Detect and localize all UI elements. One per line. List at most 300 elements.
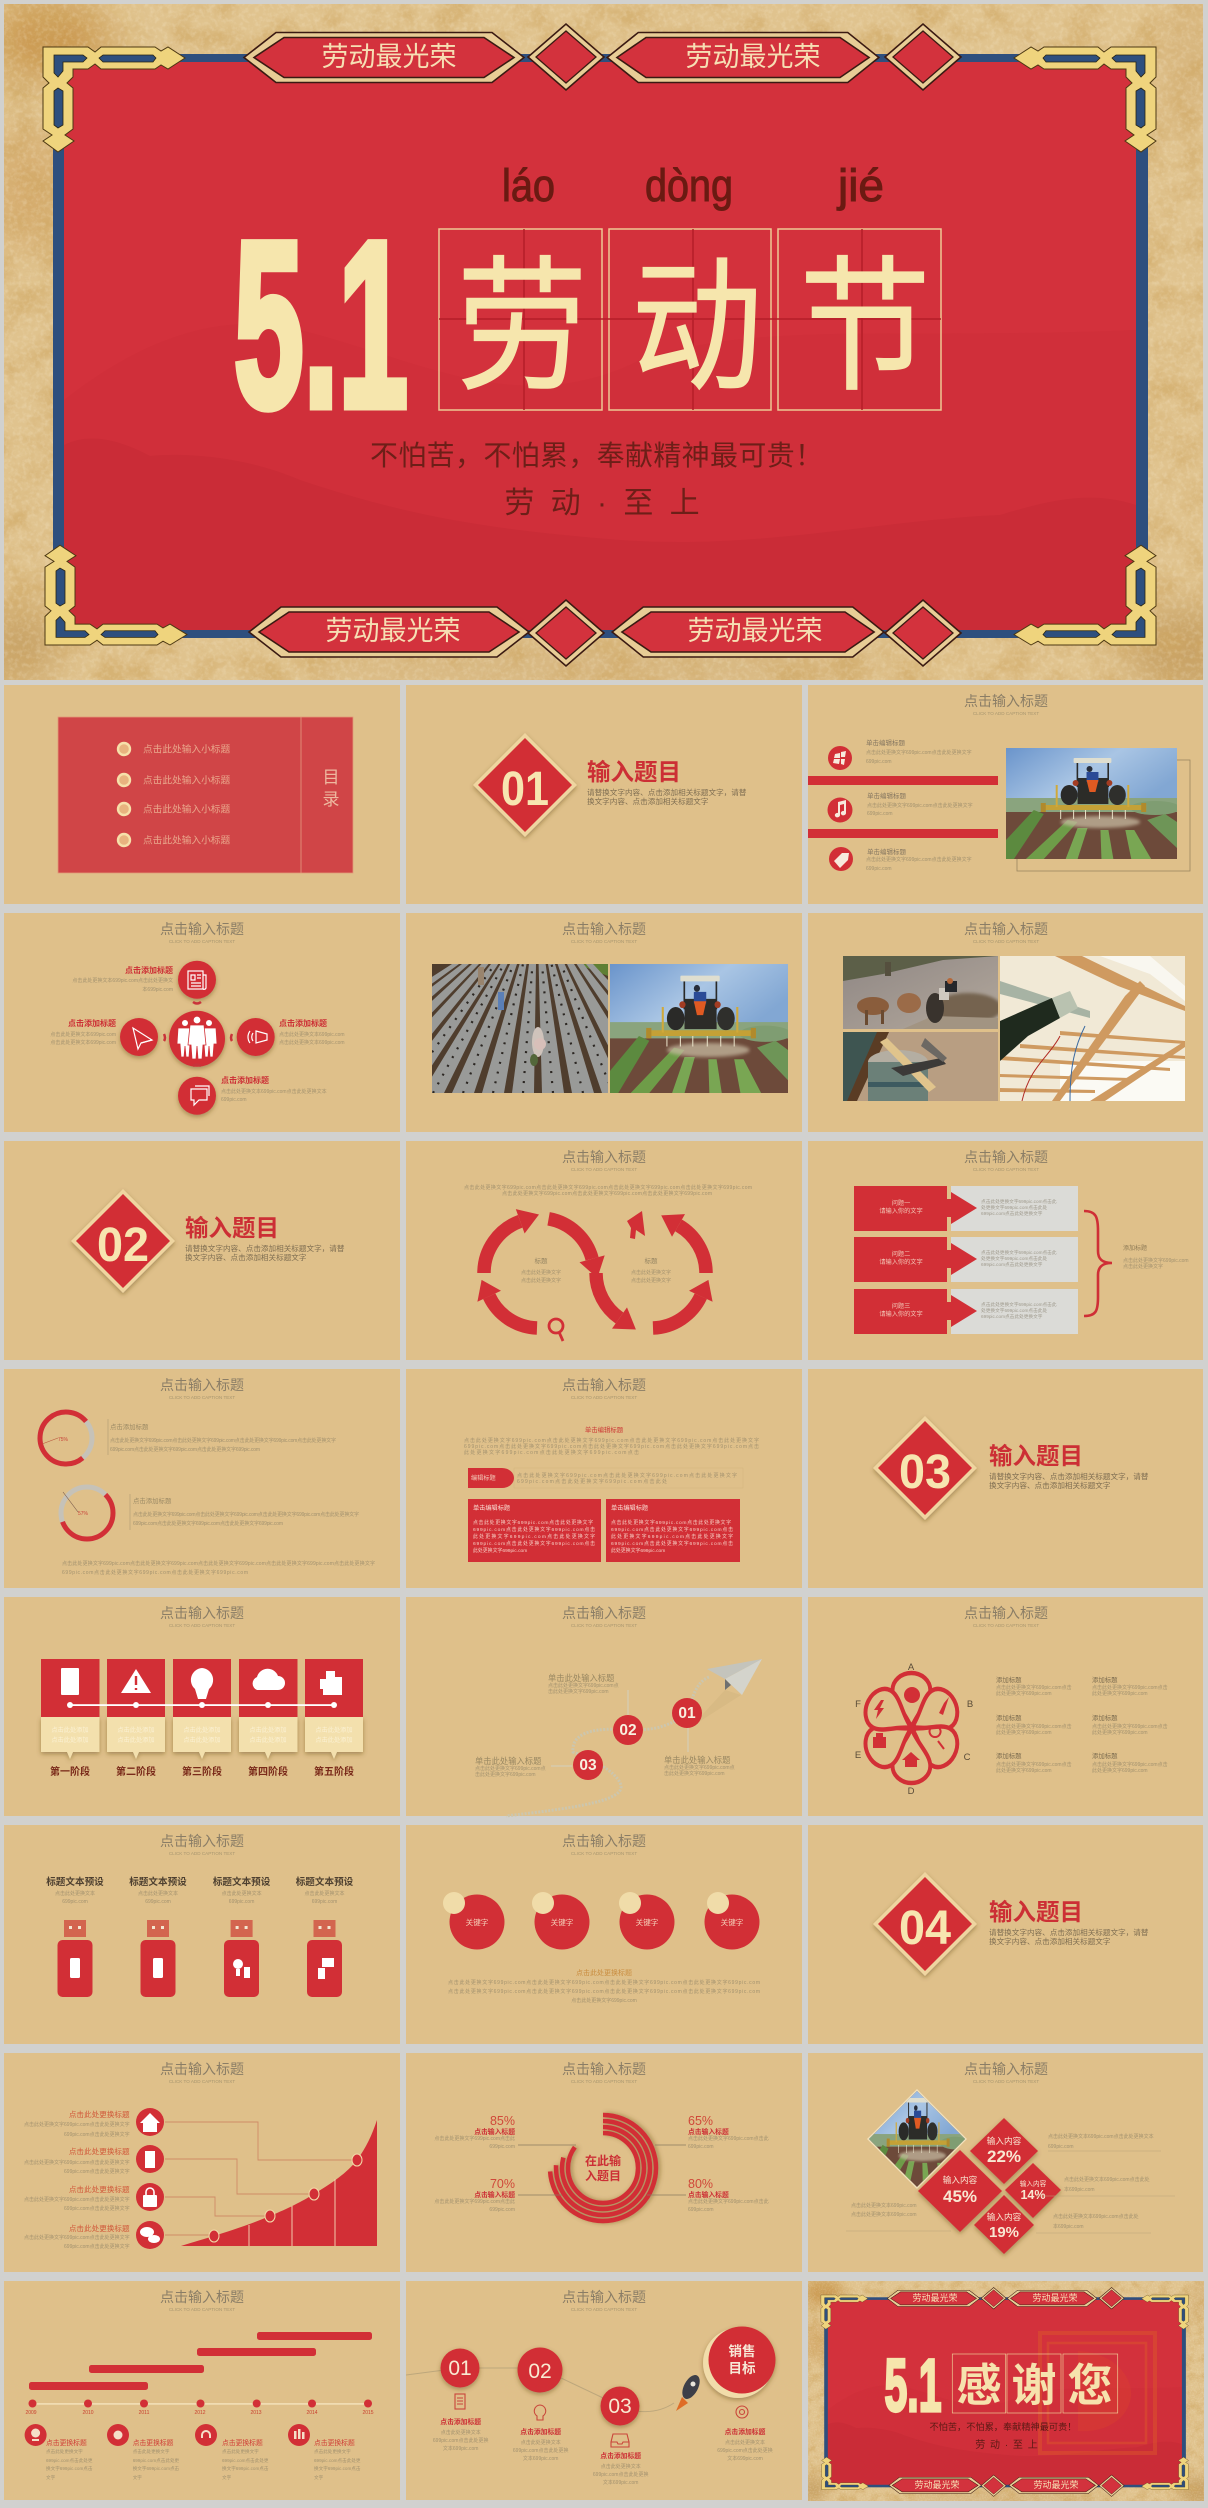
title: 点击输入标题 <box>964 921 1048 937</box>
chevrons <box>164 1002 232 1066</box>
number 04: 04 <box>899 1902 951 1955</box>
heading: 输入题目 <box>587 759 681 785</box>
photo: ceiling work <box>1000 956 1185 1101</box>
caption: CLICK TO ADD CAPTION TEXT <box>571 939 637 944</box>
cream card bases <box>41 1717 363 1759</box>
chart dividers <box>249 2179 335 2246</box>
heading: 输入题目 <box>989 1899 1083 1925</box>
subtitle: 劳 动 · 至 上 <box>975 2438 1039 2451</box>
callout bottom: 点击添加标题 <box>221 1075 269 1085</box>
left ring text: 点击此处更换文字 <box>521 1269 561 1276</box>
keyword labels: 关键字 <box>551 1917 574 1927</box>
keyword circles <box>450 1894 760 1950</box>
gray box text: 处更换文字699pic.com点击此处 <box>981 1307 1047 1314</box>
list description: 点击此处更换文字699pic.com点击此处更换文字 <box>866 856 972 863</box>
list lines: 点击此处更换文字699pic.com点击此处更换文字 <box>24 2196 130 2203</box>
item lines: 699pic.com点击此处更 <box>46 2457 93 2464</box>
flower descriptions: 此处更换文字699pic.com <box>1092 1729 1148 1736</box>
right ring text: 标题 <box>644 1256 658 1265</box>
cream card text: 点击此处添加 <box>315 1736 353 1744</box>
panel: timeline bars <box>4 2281 400 2500</box>
gray box text: 点击此处更换文字699pic.com点击此 <box>981 1301 1057 1308</box>
photo: hammer <box>843 1032 998 1101</box>
item lines <box>46 2448 361 2481</box>
right ring text <box>631 1256 671 1284</box>
red box right <box>606 1499 740 1562</box>
footer text: 699pic.com点击此处更换文字699pic.com点击此处更换文字699pic.com <box>62 1569 248 1576</box>
tag box: 699pic.com点击此处更换文字699pic.com点击此处 <box>517 1478 667 1485</box>
heading: 劳动节: 劳 <box>456 247 588 410</box>
flower descriptions: 此处更换文字699pic.com <box>996 1767 1052 1774</box>
callout right <box>279 1018 345 1046</box>
caption: CLICK TO ADD CAPTION TEXT <box>571 1395 637 1400</box>
ring 2 text: 点击添加标题 <box>133 1496 172 1505</box>
panel: usb drives <box>4 1825 400 2044</box>
area chart <box>181 2120 377 2246</box>
paragraph: 点击此处更换文字699pic.com点击此处更换文字699pic.com点击此处更换文字699pic.com点击此处更换文字699pic.com <box>448 1979 760 1986</box>
photo frame <box>1017 760 1190 871</box>
description <box>989 1927 1149 1946</box>
column text: 699pic.com <box>62 1899 88 1905</box>
goal circle <box>703 2326 776 2398</box>
number 01: 01 <box>501 763 549 816</box>
description: 换文字内容、点击添加相关标题文字 <box>989 1480 1111 1490</box>
column headings: 标题文本预设 <box>46 1876 104 1888</box>
list lines <box>24 2121 130 2250</box>
flower letters: E <box>855 1750 861 1761</box>
ring chart 75% <box>29 1401 103 1475</box>
gray box text: 699pic.com点击此处更换文字 <box>981 1210 1043 1217</box>
flower descriptions: 点击此处更换文字699pic.com点击 <box>1092 1684 1168 1691</box>
column 1 text: 点击添加标题 <box>440 2417 481 2426</box>
icon: magnifier <box>549 1319 563 1341</box>
list lines: 点击此处更换文字699pic.com点击此处更换文字 <box>24 2234 130 2241</box>
percentages: 45% <box>943 2187 977 2206</box>
label top: 击此处更换文字699pic.com <box>548 1688 609 1695</box>
cream card text: 点击此处添加 <box>183 1736 221 1744</box>
title: 点击输入标题 <box>562 921 646 937</box>
label left: 点击此处更换文字699pic.com点 <box>475 1765 546 1772</box>
column 4 text: 699pic.com点击此处更换 <box>717 2447 773 2454</box>
red diamonds <box>918 2118 1061 2254</box>
description <box>989 1471 1149 1490</box>
heading: 感谢您: 感 <box>956 2360 1002 2411</box>
item lines: 点击此处更换文字 <box>222 2448 259 2455</box>
title: 点击输入标题 <box>562 1605 646 1621</box>
keyword labels: 关键字 <box>636 1917 659 1927</box>
left ring text <box>521 1256 561 1284</box>
stage labels: 第三阶段 <box>182 1765 222 1778</box>
column text: 点击此处更换文本 <box>304 1890 345 1897</box>
ring 1 text: 点击此处更换文字699pic.com点击此处更换文字699pic.com点击此处更换文字699pic.com点击此处更换文字 <box>110 1437 336 1444</box>
column 1 text: 文本699pic.com <box>443 2445 478 2452</box>
flower petals <box>859 1673 964 1783</box>
photo: oxen plough <box>843 956 1002 1029</box>
intro text: 点击此处更换文字699pic.com点击此处更换文字699pic.com点击此处更换文字699pic.com <box>502 1190 712 1197</box>
step numbers: 03 <box>579 1757 597 1774</box>
seal overlay <box>1040 2333 1155 2453</box>
toc red block <box>58 717 353 873</box>
red bars <box>808 776 998 838</box>
satellite circles <box>120 961 275 1115</box>
list text <box>866 738 906 856</box>
goal text <box>728 2343 756 2376</box>
panel: text boxes <box>406 1369 802 1588</box>
flower letters: D <box>908 1786 915 1797</box>
panel: diamond percentages <box>808 2053 1203 2272</box>
red box left: 点击此处更换文字699pic.com点击此处更换文字 <box>473 1519 593 1526</box>
leader lines <box>518 2145 686 2195</box>
title: 点击输入标题 <box>964 1605 1048 1621</box>
left ring text: 标题 <box>534 1256 548 1265</box>
label 57% <box>63 1492 89 1517</box>
percentages: 14% <box>1020 2188 1046 2202</box>
panel: tractor with icon list <box>808 685 1203 904</box>
side text: 本699pic.com <box>1064 2186 1095 2193</box>
column 3 text <box>593 2451 648 2486</box>
percentages <box>943 2135 1047 2241</box>
plane trail shadow <box>691 1690 741 1727</box>
label 70%: 699pic.com <box>489 2207 515 2213</box>
title: 点击输入标题 <box>160 2289 244 2305</box>
list description: 699pic.com <box>866 759 892 765</box>
center label: 入题目 <box>585 2169 621 2183</box>
paragraph: 699pic.com点击此处更换文字699pic.com点击此处更换文字699pic.com点击此处更换文字699pic.com点击 <box>464 1443 759 1450</box>
red box labels: 请输入你的文字 <box>879 1207 923 1215</box>
side text: 点击此处更换文本699pic.com点击此处 <box>1064 2176 1150 2183</box>
label 80%: 点击输入标题 <box>688 2190 729 2199</box>
column headings: 标题文本预设 <box>296 1876 354 1888</box>
usb connector dots <box>69 1926 330 1929</box>
caption: CLICK TO ADD CAPTION TEXT <box>973 711 1039 716</box>
diamond 04 <box>873 1872 977 1976</box>
label left <box>475 1756 546 1778</box>
banner text: bottom right: 劳动最光荣 <box>688 616 822 646</box>
column text: 699pic.com <box>229 1899 254 1905</box>
item lines: 换文字699pic.com点击 <box>133 2465 180 2472</box>
label 80%: 699pic.com <box>688 2207 714 2213</box>
gray box text: 点击此处更换文字699pic.com点击此 <box>981 1198 1057 1205</box>
connectors <box>165 2122 357 2235</box>
banner text: 劳动最光荣 <box>914 2479 960 2490</box>
keyword labels <box>466 1917 744 1927</box>
timeline <box>67 1702 337 1708</box>
paragraph: 点击此处更换文字699pic.com点击此处更换文字699pic.com点击此处更换文字699pic.com点击此处更换文字 <box>464 1437 759 1444</box>
list lines: 699pic.com点击此处更换文字 <box>64 2205 130 2212</box>
toc item text: 点击此处输入小标题 <box>143 802 230 816</box>
writing grid <box>952 2354 1118 2413</box>
title: 点击输入标题 <box>562 1833 646 1849</box>
cream card text: 点击此处添加 <box>183 1726 221 1734</box>
icon: megaphone <box>627 1211 645 1239</box>
red box labels: 问题三 <box>892 1302 910 1310</box>
label top: 点击此处更换文字699pic.com点 <box>548 1682 619 1689</box>
caption: CLICK TO ADD CAPTION TEXT <box>571 1851 637 1856</box>
red box labels <box>879 1199 923 1318</box>
flower labels: 添加标题 <box>1092 1751 1118 1760</box>
cream card text: 点击此处添加 <box>117 1736 155 1744</box>
callout bottom: 点击此处更换文本699pic.com点击此处更换文本 <box>221 1088 327 1095</box>
list headings: 点击此处更换标题 <box>69 2146 130 2156</box>
panel: flower diagram <box>808 1597 1203 1816</box>
panel: concentric arc chart <box>406 2053 802 2272</box>
list lines: 699pic.com点击此处更换文字 <box>64 2131 130 2138</box>
list description <box>866 749 973 872</box>
column text: 点击此处更换文本 <box>55 1890 95 1897</box>
red box right: 此处更换文字699pic.com <box>611 1547 665 1554</box>
panel: two farm photos <box>252 913 802 1132</box>
tag box: 编辑标题 <box>471 1474 496 1482</box>
flower descriptions: 此处更换文字699pic.com <box>1092 1767 1148 1774</box>
banner text: bottom left: 劳动最光荣 <box>326 616 460 646</box>
column headings <box>46 1876 354 1888</box>
number 02: 02 <box>97 1219 149 1272</box>
flower letters: C <box>964 1752 971 1763</box>
percentages: 19% <box>989 2224 1019 2241</box>
item lines: 文字 <box>46 2474 56 2481</box>
item headings: 点击更换标题 <box>133 2438 174 2447</box>
paragraph: 点击此处更换文字699pic.com <box>571 1997 637 2004</box>
column 4 text <box>717 2427 773 2462</box>
side text: 本699pic.com <box>1053 2223 1084 2230</box>
cream card text: 点击此处添加 <box>249 1726 287 1734</box>
icon glyphs <box>833 751 849 868</box>
ring 1 text <box>108 1419 336 1455</box>
ring 1 text: 699pic.com点击此处更换文字699pic.com点击此处更换文字699pic.com <box>110 1446 260 1453</box>
red card tops <box>41 1659 363 1717</box>
icon circles <box>828 746 853 871</box>
side text <box>851 2133 1154 2230</box>
side text: 点击此处更换文本699pic.com点击此处 <box>1053 2213 1139 2220</box>
red box left: 此处更换文字699pic.com <box>473 1547 527 1554</box>
red box labels: 请输入你的文字 <box>879 1258 923 1266</box>
ring 2 text: 699pic.com点击此处更换文字699pic.com点击此处更换文字699pic.com <box>133 1520 283 1527</box>
item lines: 699pic.com点击此处更 <box>314 2457 361 2464</box>
panel: section 02 <box>4 1141 400 1360</box>
percentages: 输入内容 <box>1020 2179 1047 2188</box>
description: 换文字内容、点击添加相关标题文字 <box>587 796 709 806</box>
item lines: 文字 <box>133 2474 142 2481</box>
flower letters: A <box>908 1662 915 1673</box>
flower labels: 添加标题 <box>996 1713 1022 1722</box>
column text <box>55 1890 345 1905</box>
years: 2010 <box>82 2410 94 2416</box>
list headings: 点击此处更换标题 <box>69 2184 130 2194</box>
paragraph <box>464 1437 759 1456</box>
panel: sales target path <box>406 2281 802 2500</box>
caption: CLICK TO ADD CAPTION TEXT <box>973 1623 1039 1628</box>
toc label: 目 <box>322 768 340 787</box>
list text: 单击编辑标题 <box>867 847 906 856</box>
rocket icon <box>676 2372 703 2411</box>
label left: 击此处更换文字699pic.com <box>475 1771 536 1778</box>
caption: CLICK TO ADD CAPTION TEXT <box>973 2079 1039 2084</box>
white icons <box>140 2113 160 2243</box>
list description: 点击此处更换文字699pic.com点击此处更换文字 <box>866 749 972 756</box>
caption: CLICK TO ADD CAPTION TEXT <box>169 2079 235 2084</box>
heading: 劳动节 <box>456 247 931 410</box>
cream card text: 点击此处添加 <box>51 1736 89 1744</box>
list lines: 699pic.com点击此处更换文字 <box>64 2243 130 2250</box>
toc label: 录 <box>322 790 340 809</box>
timeline axis <box>32 2403 368 2405</box>
caption: CLICK TO ADD CAPTION TEXT <box>169 1851 235 1856</box>
panel: table of contents <box>4 685 400 904</box>
red box labels: 请输入你的文字 <box>879 1310 923 1318</box>
center label: 在此输 <box>585 2153 621 2168</box>
title: 点击输入标题 <box>160 1833 244 1849</box>
item lines: 文字 <box>314 2474 324 2481</box>
description: 请替换文字内容、点击添加相关标题文字，请替 <box>989 1471 1149 1481</box>
step numbers: 01 <box>678 1705 696 1722</box>
column 4 text: 点击添加标题 <box>725 2427 766 2436</box>
banner text: 劳动最光荣 <box>1033 2479 1079 2490</box>
device icons <box>70 1958 334 1979</box>
banner text: top left: 劳动最光荣 <box>322 42 456 72</box>
toc item text: 点击此处输入小标题 <box>143 742 230 756</box>
callout bottom: 699pic.com <box>221 1097 247 1103</box>
diamond photo <box>866 2089 970 2189</box>
gray box text: 处更换文字699pic.com点击此处 <box>981 1204 1047 1211</box>
step numbers: 03 <box>608 2395 632 2418</box>
connector path <box>406 2368 674 2412</box>
keyword labels: 关键字 <box>466 1917 489 1927</box>
heading: 感谢您: 您 <box>1067 2360 1113 2411</box>
flower descriptions: 此处更换文字699pic.com <box>1092 1690 1148 1697</box>
line icons <box>133 971 267 1105</box>
list lines: 点击此处更换文字699pic.com点击此处更换文字 <box>24 2121 130 2128</box>
icon circles <box>136 2108 164 2249</box>
label 70%: 点击此处更换文字699pic.com点击此 <box>434 2198 515 2205</box>
stage icons <box>61 1668 342 1699</box>
step numbers <box>579 1705 696 1774</box>
footer text: 点击此处更换文字699pic.com点击此处更换文字699pic.com点击此处更换文字699pic.com点击此处更换文字699pic.com点击此处更换文字 <box>62 1560 375 1567</box>
column 1 text: 699pic.com点击此处更换 <box>433 2437 488 2444</box>
column 4 text: 文本699pic.com <box>727 2455 763 2462</box>
title: 点击输入标题 <box>562 2289 646 2305</box>
column text: 699pic.com <box>145 1899 171 1905</box>
caption: CLICK TO ADD CAPTION TEXT <box>973 939 1039 944</box>
years: 2013 <box>250 2410 262 2416</box>
column 1 text: 点击此处更换文本 <box>441 2429 481 2436</box>
column headings: 标题文本预设 <box>213 1876 271 1888</box>
red box labels: 问题一 <box>892 1199 910 1207</box>
heading: 感谢您: 谢 <box>1011 2360 1057 2411</box>
gray boxes <box>951 1186 1078 1334</box>
callout top: 点击添加标题 <box>125 965 173 975</box>
callout right: 点击此处更换文本699pic.com <box>279 1039 345 1046</box>
label 70% <box>434 2177 515 2213</box>
list description: 699pic.com <box>867 811 893 817</box>
description: 换文字内容、点击添加相关标题文字 <box>989 1936 1111 1946</box>
petal icons <box>873 1687 949 1767</box>
panel: people radial <box>4 913 400 1132</box>
brace label: 点击此处更换文字 <box>1123 1263 1163 1270</box>
slogan: 不怕苦，不怕累，奉献精神最可贵！ <box>370 440 823 471</box>
callout right: 点击添加标题 <box>279 1018 327 1028</box>
column 3 text: 699pic.com点击此处更换 <box>593 2471 648 2478</box>
callout left: 点击添加标题 <box>68 1018 116 1028</box>
flower labels: 添加标题 <box>1092 1675 1118 1684</box>
right ring text: 点击此处更换文字 <box>631 1269 671 1276</box>
hero panel: 5.1 labor day cover <box>0 0 1208 695</box>
red box right: 699pic.com点击此处更换文字699pic.com点击 <box>611 1540 733 1547</box>
gray box text: 699pic.com点击此处更换文字 <box>981 1313 1043 1320</box>
subheading: 单击编辑标题 <box>585 1425 624 1434</box>
title: 点击输入标题 <box>160 1605 244 1621</box>
arrow heads <box>477 1209 713 1330</box>
flower labels: 添加标题 <box>996 1751 1022 1760</box>
gray box text: 点击此处更换文字699pic.com点击此 <box>981 1249 1057 1256</box>
stage labels: 第一阶段 <box>50 1765 90 1778</box>
icon circles <box>25 2424 310 2446</box>
panel: paper plane path <box>406 1597 802 1816</box>
label 85%: 点击此处更换文字699pic.com点击此 <box>434 2135 515 2142</box>
item lines: 换文字699pic.com点击 <box>46 2465 93 2472</box>
percentages: 输入内容 <box>987 2211 1022 2222</box>
small cream circles <box>443 1892 729 1914</box>
label top <box>548 1673 619 1695</box>
column text: 699pic.com <box>312 1899 337 1905</box>
step circles <box>573 1698 702 1780</box>
caption: CLICK TO ADD CAPTION TEXT <box>571 2079 637 2084</box>
caption: CLICK TO ADD CAPTION TEXT <box>571 2307 637 2312</box>
item headings <box>46 2438 355 2447</box>
leader arrows <box>551 1690 688 1766</box>
photo: tractor <box>1006 748 1180 859</box>
timeline dots <box>28 2400 372 2408</box>
gray box text: 699pic.com点击此处更换文字 <box>981 1261 1043 1268</box>
flower descriptions <box>996 1684 1168 1774</box>
flower letters: F <box>855 1699 861 1710</box>
subtitle: 劳 动 · 至 上 <box>504 487 704 520</box>
column 3 text: 点击添加标题 <box>600 2451 641 2460</box>
column 4 text: 点击此处更换文本 <box>725 2439 765 2446</box>
flower labels <box>996 1675 1118 1760</box>
item lines: 699pic.com点击此处更 <box>222 2457 269 2464</box>
column text: 点击此处更换文本 <box>222 1890 262 1897</box>
list lines: 点击此处更换文字699pic.com点击此处更换文字 <box>24 2159 130 2166</box>
label right: 单击此处输入标题 <box>664 1755 730 1765</box>
label 85%: 85% <box>490 2114 515 2128</box>
heading: 输入题目 <box>989 1443 1083 1469</box>
flower letters <box>855 1662 973 1797</box>
diamond 02 <box>71 1189 175 1293</box>
writing grid boxes <box>439 229 941 410</box>
title: 点击输入标题 <box>964 2061 1048 2077</box>
item lines: 点击此处更换文字 <box>46 2448 83 2455</box>
label 80%: 点击此处更换文字699pic.com点击此 <box>688 2198 769 2205</box>
step numbers: 02 <box>619 1722 637 1739</box>
red box right: 点击此处更换文字699pic.com点击此处更换文字 <box>611 1519 731 1526</box>
label 65%: 点击此处更换文字699pic.com点击此 <box>688 2135 769 2142</box>
toc item text <box>143 742 230 846</box>
label top: 单击此处输入标题 <box>548 1673 614 1683</box>
keyword labels: 关键字 <box>721 1917 744 1927</box>
label 57%: 57% <box>78 1511 89 1517</box>
panel: growth curve <box>4 2053 400 2272</box>
red box right: 此处更换文字699pic.com点击此处更换文字 <box>611 1533 733 1540</box>
goal text: 销售 <box>728 2343 756 2359</box>
list text: 单击编辑标题 <box>867 791 906 800</box>
panel: figure eight arrows <box>406 1141 802 1360</box>
caption: CLICK TO ADD CAPTION TEXT <box>571 1623 637 1628</box>
gray box text: 处更换文字699pic.com点击此处 <box>981 1255 1047 1262</box>
callout top <box>72 965 173 993</box>
panel: three problems <box>808 1141 1203 1360</box>
panel: section 03 <box>808 1369 1203 1588</box>
caption: CLICK TO ADD CAPTION TEXT <box>169 2307 235 2312</box>
